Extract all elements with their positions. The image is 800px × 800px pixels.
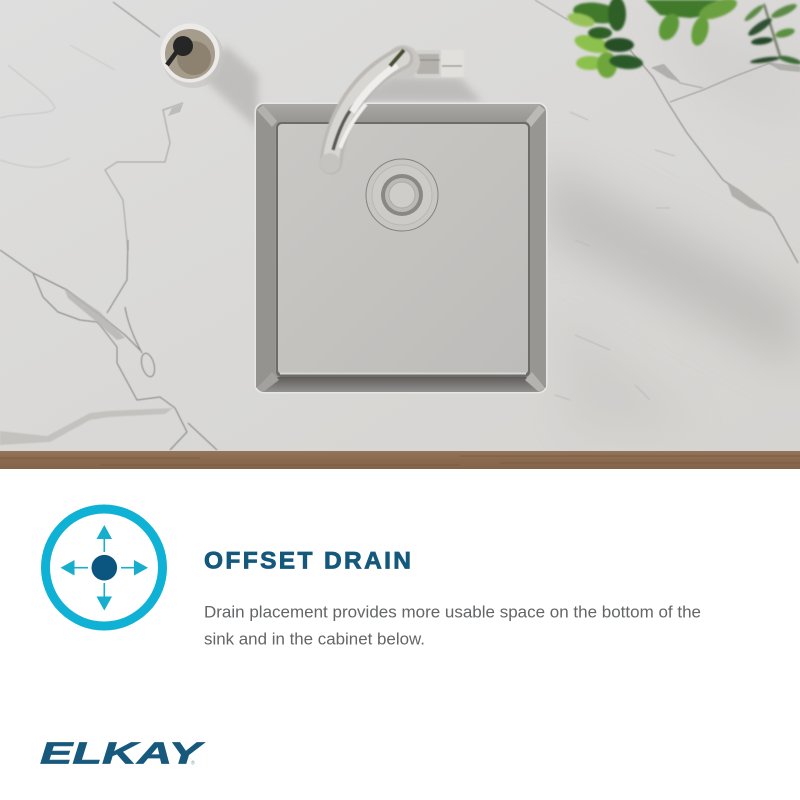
marble veins right bbox=[535, 0, 800, 263]
arrow up bbox=[96, 525, 112, 552]
faucet spout bbox=[331, 58, 402, 163]
marble countertop bbox=[0, 0, 800, 451]
arrow right bbox=[121, 560, 148, 576]
soap and faucet cast shadows bbox=[205, 45, 258, 130]
body text: sink and in the cabinet below. bbox=[204, 630, 425, 648]
wood edge bbox=[0, 451, 800, 469]
body text: Drain placement provides more usable space on the bottom of the bbox=[204, 604, 701, 622]
heading: OFFSET DRAIN bbox=[204, 548, 411, 574]
sink floor bbox=[276, 122, 530, 377]
marble veins upper bbox=[0, 2, 183, 250]
sink basin bbox=[254, 102, 548, 394]
faucet handle bbox=[415, 50, 464, 78]
icon drain dot bbox=[92, 555, 117, 580]
arrow left bbox=[60, 560, 88, 576]
faucet bbox=[320, 45, 464, 173]
photo: kitchen sink in marble countertop bbox=[0, 0, 800, 469]
sink rim bbox=[254, 102, 548, 394]
body text bbox=[204, 604, 701, 648]
marble veins left bbox=[0, 240, 217, 450]
logo: Elkay: ELKAY bbox=[40, 736, 206, 770]
sink corners bbox=[257, 105, 277, 127]
drain bbox=[366, 159, 438, 231]
logo: Elkay bbox=[40, 736, 206, 770]
arrow down bbox=[96, 583, 112, 610]
icon: offset drain arrows bbox=[46, 509, 162, 626]
icon ring bbox=[46, 509, 162, 626]
plant leaves bbox=[566, 0, 800, 78]
logo: Elkay: ® bbox=[191, 760, 195, 766]
soap dispenser bbox=[160, 24, 224, 88]
